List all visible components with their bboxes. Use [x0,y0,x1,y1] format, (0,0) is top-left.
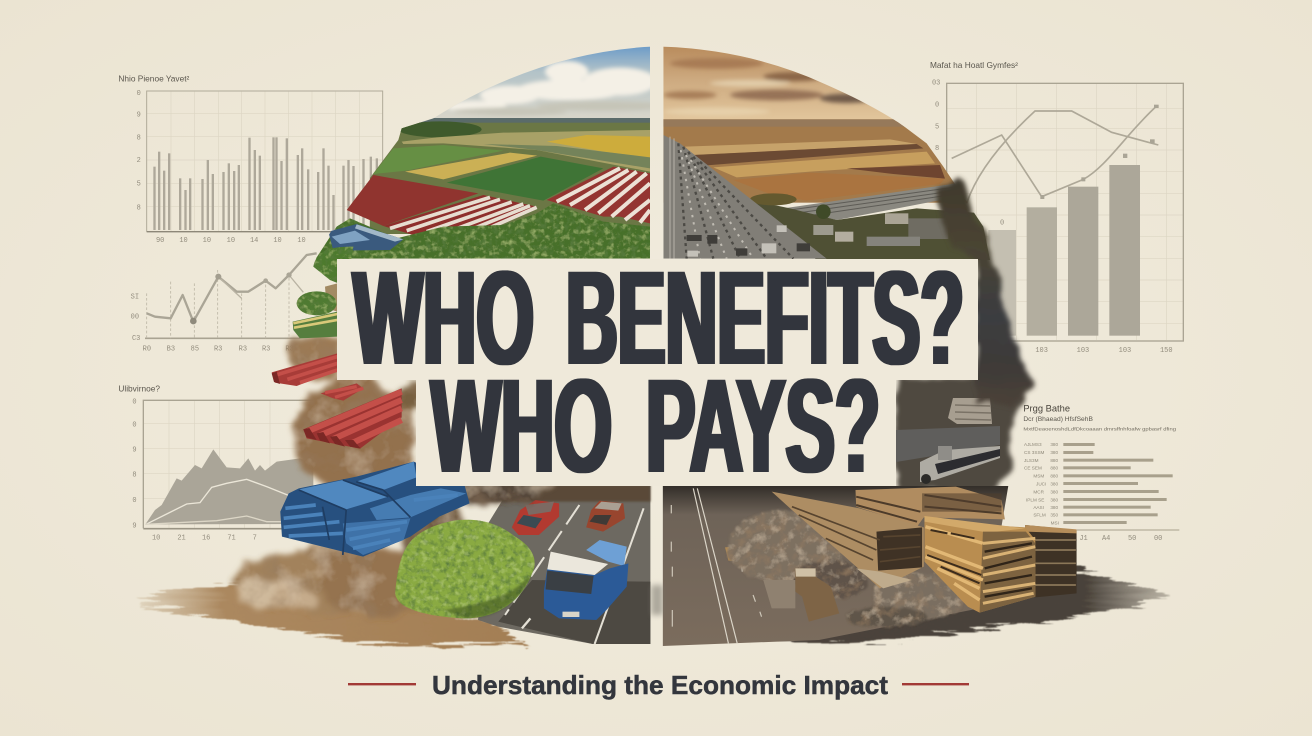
line chart: middle left: R3 [285,346,294,354]
road shadow on centre gap [651,585,663,615]
bar chart: top left: 0 [137,90,141,98]
area chart: bottom left: 71 [227,534,236,542]
line chart: middle left: R3 [214,346,222,354]
combo chart: top right: 150 [1160,347,1173,355]
horizontal bar chart: bottom right: IPLM SE [1026,497,1044,502]
combo chart: top right: 103 [1035,347,1048,355]
subtitle with rules: Understanding the Economic Impact [432,670,888,700]
combo chart: top right: 03 [932,80,940,88]
photo: truck and rubble beside title [896,378,1026,492]
bar chart: top left: 90 [156,237,164,245]
bushes and stacked crates, left of title [293,247,353,338]
horizontal bar chart: bottom right: 380 [1050,497,1059,502]
horizontal bar chart: bottom right: AJLMS3 [1024,442,1042,447]
line chart: middle left: 00 [131,314,139,322]
photo: dry farmland and highway (right half) [660,40,1010,260]
horizontal bar chart: bottom right: MCR [1033,489,1045,494]
line chart: middle left: SI [131,294,139,302]
area chart: bottom left [118,384,313,542]
line chart: middle left: R3 [239,346,247,354]
horizontal bar chart: bottom right: CS 3SSM [1024,450,1045,455]
horizontal bar chart: bottom right: JUCI [1036,481,1046,486]
combo chart: top right: 0 [935,102,939,110]
bar chart: top left: 10 [227,237,235,245]
town and vegetation [750,193,1003,260]
line chart: middle left: R3 [262,346,270,354]
road, dust and lumber (right, below title) [663,486,1077,646]
chart title: Mafat ha Hoatl Gymfes² [930,60,1018,70]
sky with clouds [434,46,650,118]
horizontal bar chart: bottom right: 380 [1050,442,1059,447]
title line 1 [353,244,964,393]
green bush [395,520,535,618]
chart heading: MxtfDeaoenoshdLdfDkcoaaan dmrsffnhfoafw gpbasrf dfing [1023,427,1176,433]
horizontal bar chart: bottom right: 380 [1050,505,1059,510]
title box bottom [416,379,896,486]
bar chart: top left: 8 [137,134,141,142]
chart heading: Prgg Bathe [1023,404,1070,414]
solar strip [783,183,962,220]
horizontal bar chart: bottom right: CE SEM [1024,466,1042,471]
line chart: middle left [131,253,317,354]
horizontal bar chart: bottom right: A4 [1102,535,1110,543]
title line 1: BENEFITS? [566,244,964,393]
area chart: bottom left: 7 [253,534,257,542]
chart title: Nhio Pienoe Yavet² [118,73,190,83]
horizontal bar chart: bottom right: AASI [1033,505,1044,510]
combo chart: top right [930,60,1183,355]
bar chart: top left: 10 [297,237,306,245]
combo chart: top right: 103 [1077,347,1089,355]
ground splatter: left brown [140,580,529,647]
title panel [337,244,978,501]
line chart: middle left: R0 [143,346,151,354]
combo chart: top right: 103 [1119,347,1131,355]
blue truck [544,540,628,620]
horizontal bar chart: bottom right: MSM [1033,474,1044,479]
horizontal bar chart: bottom right: 880 [1050,466,1059,471]
title line 2: PAYS? [646,352,880,501]
sepia sky [663,46,894,120]
bar chart: top left [118,73,383,245]
combo chart: top right: 8 [935,145,939,153]
horizontal bar chart: bottom right: 380 [1050,481,1059,486]
blue lumber stacks [280,462,470,557]
line chart: middle left: C3 [132,335,140,343]
fields [347,118,653,235]
photo: green farmland (left half) [316,46,650,259]
beige dust [728,510,968,627]
horizontal bar chart: bottom right: 380 [1050,489,1059,494]
area chart: bottom left: 9 [132,523,137,531]
road (left, below title) [471,485,650,644]
horizontal bar chart: bottom right: 00 [1154,535,1162,543]
red car right [586,501,625,532]
horizontal bar chart: bottom right: MSI [1051,520,1059,525]
line chart: middle left: 85 [191,346,199,354]
horizontal bar chart: bottom right [1023,404,1179,543]
horizontal bar chart: bottom right: J1 [1079,535,1088,543]
area chart: bottom left: 9 [132,447,137,455]
horizontal bar chart: bottom right: 380 [1050,450,1059,455]
combo chart: top right: 5 [935,124,939,132]
chart heading: Dcr (Bhaead) HfsfSehB [1023,416,1093,423]
lumber stack long [772,492,924,588]
area chart: bottom left: 0 [132,422,137,430]
smoke: right edge [935,180,1032,405]
area chart: bottom left: 0 [132,398,137,406]
red car left [512,500,559,535]
title box top [337,259,978,380]
area chart: bottom left: 8 [132,472,137,480]
area chart: bottom left: 0 [132,497,137,505]
horizontal bar chart: bottom right: 880 [1050,458,1059,463]
chart title: Ulibvirnoe? [118,384,160,394]
highway with traffic [663,135,827,259]
area chart: bottom left: 10 [152,534,160,542]
ground splatter: right dark [751,570,1169,642]
pallet stack front [924,516,1077,613]
crates [763,568,839,622]
tree line [315,203,650,260]
bar chart: top left: 10 [179,237,188,245]
farm machinery [328,224,403,251]
area chart: bottom left: 16 [202,534,210,542]
horizontal bar chart: bottom right: 50 [1128,535,1136,543]
dry fields [663,119,966,203]
bar chart: top left: 10 [203,237,211,245]
combo chart: top right: 0 [1000,219,1004,227]
bar chart: top left: 5 [137,180,141,188]
horizontal bar chart: bottom right: SFLM [1033,513,1046,518]
bar chart: top left: 14 [250,237,258,245]
horizontal bar chart: bottom right: JLS3M [1024,458,1039,463]
lumber stack back [856,487,1005,527]
bar chart: top left: 2 [137,157,141,165]
line chart: middle left: B3 [167,346,175,354]
dust cloud: left [235,333,560,616]
bar chart: top left: 8 [137,204,141,212]
chart heading [1023,404,1176,433]
horizontal bar chart: bottom right: 350 [1050,513,1059,518]
title line 2: WHO [431,352,612,501]
title line 1: WHO [353,244,534,393]
bar chart: top left: 10 [273,237,282,245]
bar chart: top left: 9 [137,112,141,120]
red lumber stacks [272,353,402,449]
horizontal bar chart: bottom right: 880 [1050,474,1059,479]
area chart: bottom left: 21 [177,534,186,542]
